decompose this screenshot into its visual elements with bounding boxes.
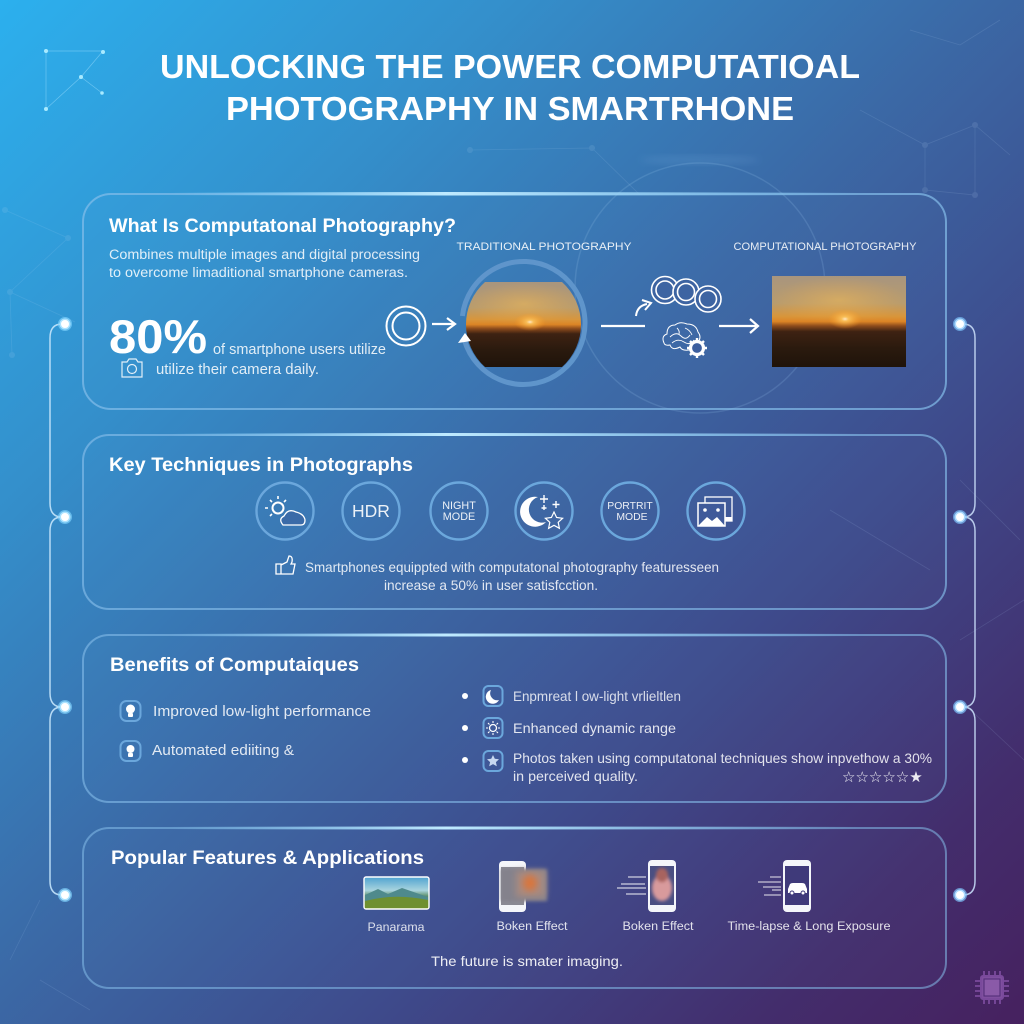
feature: time-lapse and long exposure bbox=[728, 860, 891, 933]
benefit: low-light: Improved low-light performance bbox=[153, 704, 371, 720]
satisfaction text bbox=[305, 559, 719, 593]
satisfaction text: increase a 50% in user satisfcction. bbox=[384, 577, 598, 593]
icon: portrait mode bbox=[602, 482, 658, 540]
heading: Benefits of Computaiques bbox=[110, 655, 359, 676]
benefit: moon: Enpmreat l ow-light vrlieltlen bbox=[513, 689, 681, 704]
stat: 80 percent: 80% bbox=[109, 310, 207, 363]
decoration: lens halo bbox=[575, 156, 825, 413]
feature: bokeh effect 2 bbox=[617, 860, 694, 933]
feature: bokeh effect 2: Boken Effect bbox=[622, 919, 694, 933]
icon: chip bbox=[975, 971, 1009, 1004]
icon: night mode bbox=[430, 482, 488, 540]
feature: bokeh effect 1 bbox=[496, 861, 568, 933]
icon: moon and stars bbox=[516, 482, 572, 540]
title: PHOTOGRAPHY IN SMARTRHONE bbox=[226, 91, 794, 128]
icon: thumbs up bbox=[276, 556, 295, 574]
heading: Key Techniques in Photographs bbox=[109, 455, 413, 476]
stat: 80 percent: utilize their camera daily. bbox=[156, 362, 319, 378]
panel: benefits bbox=[83, 634, 946, 802]
icon: lens rings bbox=[386, 306, 426, 346]
stat: 80 percent bbox=[109, 310, 386, 378]
benefit: moon bbox=[462, 686, 681, 706]
description: Combines multiple images and digital processing bbox=[109, 247, 420, 263]
benefit: sun bbox=[462, 718, 676, 738]
title: UNLOCKING THE POWER COMPUTATIOAL bbox=[160, 49, 860, 86]
icon: night mode: MODE bbox=[443, 511, 475, 523]
benefit: low-light bbox=[120, 701, 371, 721]
panel: popular features bbox=[83, 826, 946, 988]
feature: panorama bbox=[364, 877, 429, 934]
benefit: editing: Automated ediiting & bbox=[152, 743, 294, 759]
panel: key techniques bbox=[83, 433, 946, 609]
icon: portrait mode: MODE bbox=[616, 512, 648, 523]
icon: brain and gear bbox=[663, 323, 707, 358]
connector: left bbox=[50, 318, 70, 900]
panel: what is computational photography bbox=[83, 192, 946, 409]
icon: sun and cloud bbox=[256, 482, 314, 540]
heading: What Is Computatonal Photography? bbox=[109, 216, 456, 237]
icon: HDR: HDR bbox=[352, 501, 390, 521]
arrow: to processing bbox=[601, 325, 645, 327]
arrow: to traditional photo bbox=[432, 318, 455, 330]
icon: stacked lenses bbox=[652, 276, 721, 312]
arrow: to computational photo bbox=[719, 319, 758, 333]
feature: time-lapse and long exposure: Time-lapse & Long Exposure bbox=[728, 919, 891, 933]
benefit: sun: Enhanced dynamic range bbox=[513, 721, 676, 737]
photo: traditional circular bbox=[455, 261, 590, 384]
network decoration: top left bbox=[44, 49, 105, 111]
icon: HDR bbox=[342, 482, 400, 540]
description bbox=[109, 247, 420, 281]
feature: bokeh effect 1: Boken Effect bbox=[496, 919, 568, 933]
heading: Popular Features & Applications bbox=[111, 848, 424, 869]
label: traditional photography: TRADITIONAL PHOTOGRAPHY bbox=[456, 241, 632, 253]
benefit: editing bbox=[120, 741, 294, 761]
arrow: curved up bbox=[636, 300, 651, 316]
stat: 80 percent: of smartphone users utilize bbox=[213, 342, 386, 358]
rating stars: ☆☆☆☆☆★ bbox=[842, 768, 923, 786]
feature: panorama: Panarama bbox=[368, 920, 425, 934]
satisfaction text: Smartphones equippted with computatonal photography featuresseen bbox=[305, 559, 719, 575]
closing line: The future is smater imaging. bbox=[431, 954, 623, 970]
icon: night mode: NIGHT bbox=[442, 500, 476, 512]
description: to overcome limaditional smartphone cameras. bbox=[109, 265, 408, 281]
icon: camera bbox=[122, 359, 142, 377]
icon: portrait mode: PORTRIT bbox=[607, 501, 653, 512]
icon: photo gallery bbox=[688, 482, 744, 540]
benefit: perceived quality: Photos taken using computatonal techniques show inpvethow a 30% bbox=[513, 750, 932, 766]
connector: right bbox=[954, 318, 975, 900]
benefit: perceived quality bbox=[462, 750, 932, 784]
label: computational photography: COMPUTATIONAL PHOTOGRAPHY bbox=[734, 241, 917, 253]
photo: computational sunset bbox=[772, 276, 906, 367]
title bbox=[160, 49, 860, 128]
benefit: perceived quality: in perceived quality. bbox=[513, 768, 638, 784]
